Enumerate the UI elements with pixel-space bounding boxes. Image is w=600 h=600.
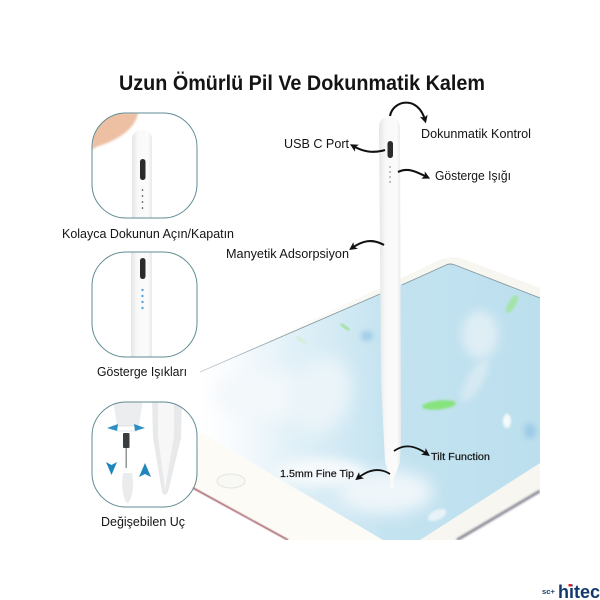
- blue arrow down: [106, 462, 117, 475]
- arrow: indicator light: [398, 170, 427, 177]
- screen paint blotches: [268, 294, 538, 522]
- label: replaceable tip: Değişebilen Uç: [101, 514, 185, 529]
- panel: touch on/off: [92, 113, 197, 225]
- home button: [217, 474, 245, 488]
- stylus indicator dots: [389, 166, 391, 183]
- tablet lower frame: [194, 432, 251, 518]
- label: touch on/off: Kolayca Dokunun Açın/Kapatın: [62, 226, 234, 241]
- panel: replaceable tip: [92, 398, 197, 507]
- logo: sc hitec: sc+: [542, 587, 556, 596]
- arrow: tilt function: [394, 446, 427, 454]
- label: indicator lights: Gösterge Işıkları: [97, 364, 187, 379]
- label: indicator light: Gösterge Işığı: [435, 168, 511, 183]
- label: magnetic adsorption: Manyetik Adsorpsiyon: [226, 246, 349, 261]
- label: fine tip: 1.5mm Fine Tip: [280, 468, 354, 480]
- tablet frame: [322, 258, 540, 540]
- tablet screen: [236, 264, 540, 540]
- blue rotation arrows: [107, 424, 145, 431]
- tablet with painted screen: [193, 258, 540, 540]
- main stylus: [379, 117, 401, 490]
- stylus USB C port: [388, 141, 393, 158]
- panel: indicator lights: [92, 252, 198, 358]
- blue arrow up: [139, 463, 151, 477]
- label: touch control: Dokunmatik Kontrol: [421, 126, 531, 141]
- removed nib: [122, 473, 133, 503]
- arrow: touch control: [390, 103, 425, 120]
- arrow: fine tip: [358, 470, 390, 478]
- label: tilt function: Tilt Function: [431, 451, 490, 463]
- screen top edge: [200, 264, 540, 372]
- arrow: magnetic adsorption: [352, 241, 384, 248]
- title: Uzun Ömürlü Pil Ve Dokunmatik Kalem: [119, 70, 485, 95]
- large nib: [152, 398, 182, 495]
- arrow: USB C port: [353, 146, 385, 152]
- stylus end without tip: [114, 402, 142, 426]
- tablet red edge: [193, 488, 288, 540]
- metal connector: [123, 433, 130, 448]
- label: USB C port: USB C Port: [284, 136, 349, 151]
- tablet right shadow: [457, 491, 540, 540]
